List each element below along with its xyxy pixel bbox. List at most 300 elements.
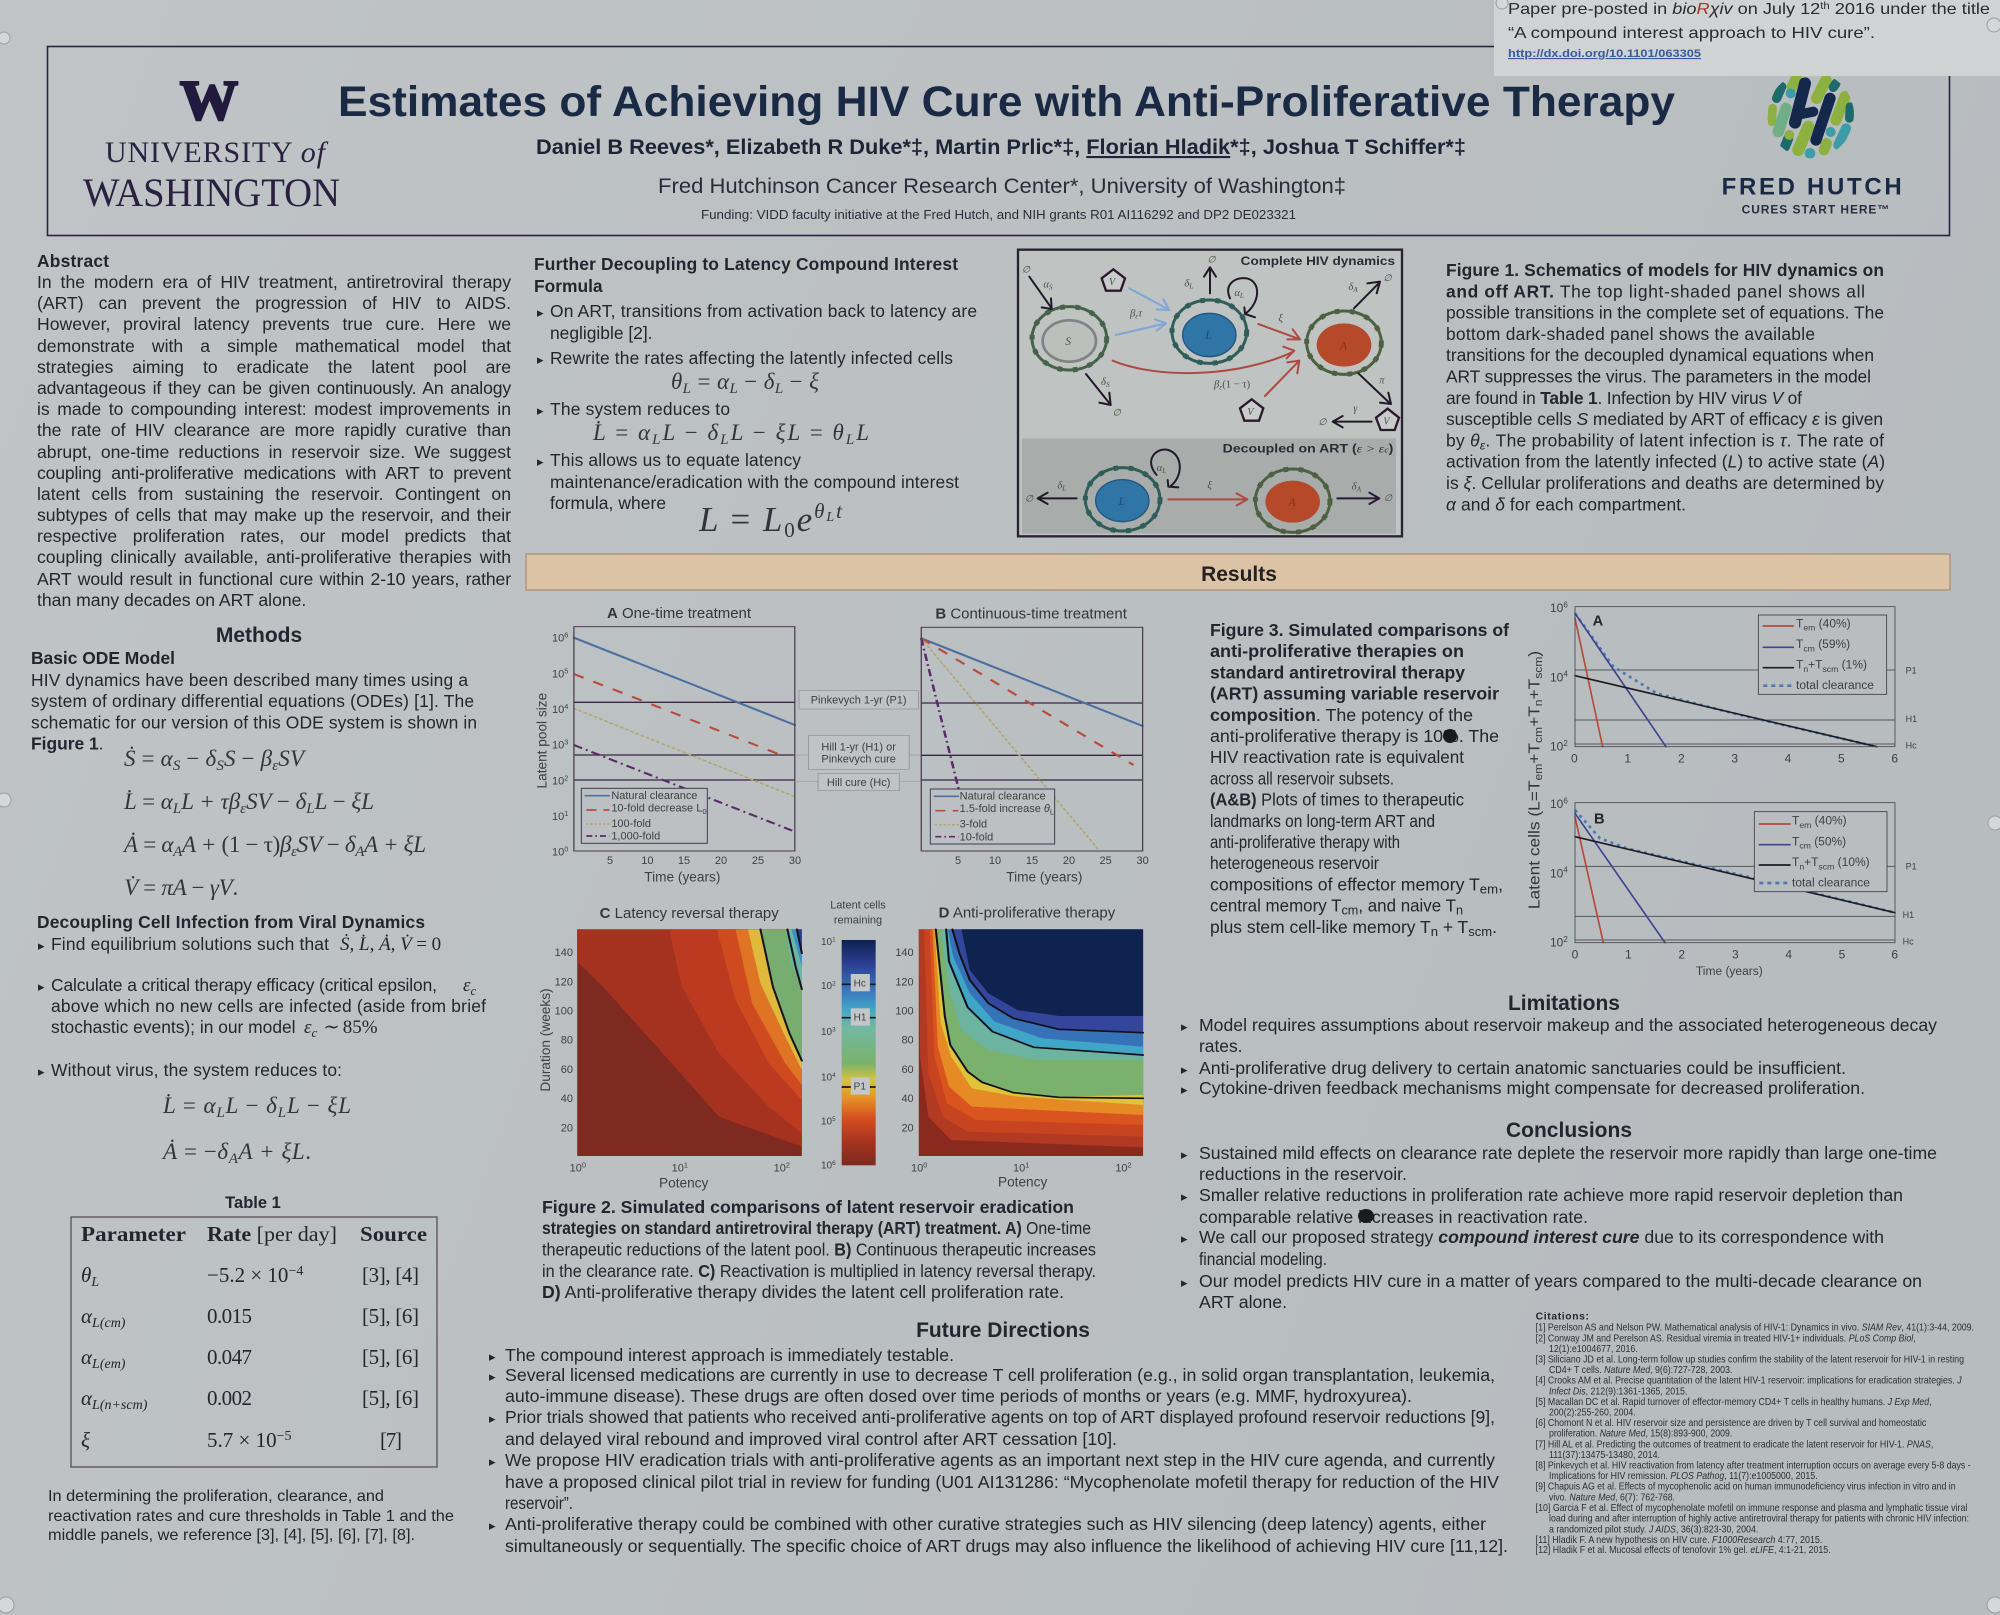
axes C: Duration (weeks) [538,988,553,1092]
red arrows [1113,324,1300,396]
legend 3A: T [1796,658,1803,672]
axis ticks A: 10 [552,740,564,752]
future directions bullets: Anti-proliferative therapy could be combined with other curative strategies such as HIV silencing (deep latency) agents, either [505,1514,1486,1534]
equation: L dot: L [651,432,660,448]
arrow labels: τ [1138,309,1143,320]
logo: University of Washington: UNIVERSITY of [105,136,329,169]
table rows: L(n+scm) [91,1398,148,1413]
abstract text: demonstrate with a simple mathematical model that [37,336,511,356]
axes 3A: 10 [1550,670,1563,684]
equation: compound interest: e [797,500,812,539]
arrow labels: ξ [1278,314,1283,325]
decoupled cell A [1255,469,1330,532]
abstract [37,251,511,617]
axes 3B: 6 [1563,796,1568,805]
axis ticks A: 15 [678,855,690,867]
limitations [1181,992,1937,1098]
decoupled labels: α [1157,463,1162,474]
equations: full ODE system: SV − δ [246,789,306,814]
decoupling bullets: stochastic events); in our model [51,1017,296,1037]
equation: L dot: L [855,420,869,445]
axis ticks B: 20 [1063,855,1075,867]
table rows: θ [81,1263,91,1287]
equations: full ODE system: ε [291,844,297,860]
citations list: [3] Siliciano JD et al. Long-term follow up studies confirm the stability of the latent reservoir for HIV-1 in resting [1536,1355,1964,1366]
threshold labels [795,691,921,791]
table header: Rate [per day] [207,1222,337,1246]
axes D: 2 [1128,1161,1132,1170]
decoupled labels: ∅ [1025,495,1034,505]
abstract text: is made to compounding interest: modest improvements in [37,399,511,419]
arrow labels: α [1234,288,1240,299]
axes 3A: 2 [1678,752,1685,766]
blue arrows [1116,288,1169,335]
equations: full ODE system: S [216,758,224,774]
figure 3 caption: landmarks on long-term ART and [1210,811,1435,831]
equation: theta L: θ [671,369,682,394]
axes 3B: 10 [1550,866,1563,880]
axes C: 80 [561,1035,573,1047]
figure 3 caption: anti-proliferative therapy is 10%. The [1210,726,1499,746]
equations: full ODE system: Ȧ = α [124,832,173,857]
limitations bullets: Cytokine-driven feedback mechanisms might compensate for decreased proliferation. [1199,1078,1865,1098]
axes 3B: 4 [1563,866,1568,875]
axes 3A: 2 [1563,739,1568,748]
abstract text: coupling clinically available, anti-proliferative therapies with [37,547,511,567]
heatmap D: anti-proliferative therapy: D Anti-proliferative therapy [939,904,1116,921]
figure 3 caption: n [1431,924,1438,939]
decoupling bullets [38,933,486,1080]
decoupled labels: ξ [1207,480,1212,491]
logo: University of Washington: W [180,70,238,132]
sticky note: paper pre-posted [1494,0,2000,76]
section bullets [537,301,977,513]
legend 3B: (50%) [1811,834,1846,848]
decoupled cell A: A [1288,497,1296,509]
colorbar: latent cells remaining: remaining [834,914,882,926]
axes 3A: 10 [1550,601,1563,615]
citations list: 200(2):255-260, 2004. [1549,1407,1636,1418]
figure 1 caption: ART suppresses the virus. The parameters in the model [1446,366,1871,386]
logo: University of Washington [83,70,340,215]
arrow labels: L [1239,291,1244,300]
citations list: [2] Conway JM and Perelson AS. Residual viremia in treated HIV-1+ individuals. PLoS Comp Biol, [1536,1333,1916,1344]
axis ticks A: 10 [552,811,564,823]
equation: compound interest: L [825,510,834,525]
legend 3B: +T [1804,855,1819,869]
citations list: 12(1):e1004677, 2016. [1549,1344,1638,1355]
conclusions [1181,1119,1937,1312]
legend 3A: em [1803,623,1815,633]
chart 3A [1550,600,1917,766]
axes 3A: 3 [1731,752,1738,766]
legend 3B: scm [1818,861,1834,871]
arrow labels: ε [1219,382,1222,391]
legend 3A: (40%) [1815,616,1851,630]
equations: reduced system: L − δ [226,1093,277,1118]
citations list: vivo. Nature Med, 6(7): 762-768. [1549,1492,1675,1503]
decoupled labels: δ [1057,480,1062,491]
decoupled labels: ∅ [1384,494,1393,504]
equations: reduced system: L [215,1105,225,1121]
future directions bullets: have a proposed clinical pilot trial in review for funding (U01 AI131286: “Mycophenolate mofetil therapy for reduction of the HIV [505,1472,1499,1492]
table rows: −5 [277,1429,292,1444]
axes D: 1 [1025,1161,1029,1170]
legend B: 1.5-fold increase θ [960,803,1050,815]
future directions bullets: auto-immune disease). These drugs are often dosed over time periods of months or years (e.g. MMF, hydroxyurea). [505,1386,1412,1406]
equations: full ODE system: A + ξL [362,832,426,857]
basic ODE model heading: Basic ODE Model [31,648,175,668]
equation: theta L: − ξ [790,369,819,394]
chart B: continuous-time treatment: B Continuous-time treatment [935,606,1128,623]
axis ticks A: 10 [552,847,564,859]
figure 2 caption: D) Anti-proliferative therapy divides the latent cell proliferation rate. [542,1282,1064,1302]
equations: full ODE system: L̇ = α [124,789,173,814]
axes 3B: 6 [1891,948,1898,962]
citations list: [8] Pinkevych et al. HIV reactivation from latency after treatment interruption occurs on average every 5-8 days - [1536,1461,1971,1472]
header panel [48,46,1950,236]
future directions bullets: ▸ [489,1412,496,1427]
legend B: L [1050,808,1054,817]
sticky note: paper pre-posted: 2016 under the title [1830,1,1990,18]
arrow labels: S [1049,282,1053,291]
legend 3A: T [1796,616,1803,630]
decoupling bullets: c [470,983,476,998]
figure 3 caption: cm [1341,903,1358,918]
axes 3B: 10 [1550,936,1563,950]
axes 3B: 1 [1625,948,1632,962]
citations list: [6] Chomont N et al. HIV reservoir size and persistence are driven by T cell survival and homeostatic [1536,1418,1926,1429]
equations: full ODE system: A [354,844,365,860]
axes 3A: 0 [1571,752,1578,766]
equation: compound interest: t [836,499,843,523]
future directions [489,1319,1508,1556]
future directions bullets: ▸ [489,1350,496,1365]
figure 1 caption: Figure 1. Schematics of models for HIV dynamics on [1446,260,1884,280]
results banner [526,554,1950,590]
authors: Daniel B Reeves*, Elizabeth R Duke*‡, Martin Prlic*‡, Florian Hladik*‡, Joshua T Schiffer*‡ [536,136,1466,159]
decoupling bullets: Without virus, the system reduces to: [51,1060,342,1080]
conclusions bullets: ▸ [1181,1232,1188,1247]
figure 2 bottom: heatmaps [538,900,1143,1190]
table rows [81,1263,419,1452]
table rows: 0.002 [207,1386,252,1410]
axes 3A [1550,600,1917,766]
axes D: 10 [911,1163,923,1175]
figure 3 charts: cm [1533,727,1545,743]
section bullets: ▸ [537,404,544,419]
future directions bullets: Prior trials showed that patients who received anti-proliferative agents on top of ART displayed profound reservoir reductions [9], [505,1407,1495,1427]
conclusions bullets: comparable relative increases in reactivation rate. [1199,1207,1588,1227]
citations list: Infect Dis, 212(9):1361-1365, 2015. [1549,1386,1687,1397]
colorbar: latent cells remaining: 10 [821,1072,832,1083]
colorbar: latent cells remaining: 4 [832,1072,836,1079]
citations list: 111(37):13475-13480, 2014. [1549,1450,1660,1461]
conclusions bullets: Sustained mild effects on clearance rate deplete the reservoir more rapidly than large one-time [1199,1143,1937,1163]
citations list: CD4+ T cells. Nature Med, 9(6):727-728, 2003. [1549,1365,1732,1376]
figure 2 caption: Figure 2. Simulated comparisons of latent reservoir eradication [542,1197,1074,1217]
decoupling bullets: Find equilibrium solutions such that [51,934,329,954]
axes D [895,947,1132,1190]
decoupling bullets: ▸ [38,1065,45,1080]
figure 3 charts: +T [1526,742,1543,764]
table rows: L(em) [91,1357,126,1372]
figure 3 caption: across all reservoir subsets. [1210,768,1394,788]
axes 3A: 1 [1624,752,1631,766]
limitations bullets: rates. [1199,1036,1242,1056]
citations list: [1] Perelson AS and Nelson PW. Mathematical analysis of HIV-1: Dynamics in vivo. SIAM Rev, 41(1):3-44, 2009. [1536,1323,1974,1334]
table rows: 0.015 [207,1304,252,1328]
section heading: Formula [534,276,603,296]
axis ticks A [552,631,801,884]
axes C: 60 [561,1064,573,1076]
arrow labels: δ [1101,377,1106,388]
figure 3 caption: em [1480,881,1498,896]
equation: theta L: L [682,381,691,397]
abstract text: However, proviral latency prevents true cure. Here we [37,314,511,334]
table rows: −5.2 × 10 [207,1263,288,1287]
equations: reduced system: Ȧ = −δ [163,1139,228,1164]
figure 3 caption: anti-proliferative therapies on [1210,641,1464,661]
sticky note: paper pre-posted: http://dx.doi.org/10.1101/063305 [1508,48,1701,60]
table rows: ξ [81,1428,90,1452]
axes C: 100 [555,1006,573,1018]
virus icons: V [1383,416,1391,427]
figure 3 caption: scm [1468,924,1492,939]
future directions bullets: We propose HIV eradication trials with anti-proliferative agents as an important next step in the HIV cure agenda, and currently [505,1450,1495,1470]
figure 3 caption: anti-proliferative therapy with [1210,832,1400,852]
axes 3B: 4 [1785,948,1792,962]
axes 3A: H1 [1906,714,1917,724]
equation: compound interest: 0 [784,518,795,542]
table rows: [5], [6] [362,1345,419,1369]
equations: full ODE system: S − β [224,746,272,771]
axes C: 0 [582,1161,586,1170]
section bullets: ▸ [537,353,544,368]
table rows: [5], [6] [362,1304,419,1328]
table rows: α [81,1386,92,1410]
panel label: complete dynamics: Complete HIV dynamics [1241,255,1395,268]
citations heading: Citations: [1536,1311,1589,1322]
arrow labels: γ [1353,404,1358,415]
equation: L dot: L − δ [662,420,718,445]
legend 3A: +T [1808,658,1823,672]
section heading [534,254,958,296]
equations: full ODE system: ε [272,758,278,774]
citations list: [10] Garcia F et al. Effect of mycophenolate mofetil on immune response and plasma and lymphatic tissue viral [1536,1503,1967,1514]
sticky note: paper pre-posted: Paper pre-posted in bioRχiv on July 12 [1508,1,1810,18]
further decoupling section [534,254,977,542]
legend A: 10-fold decrease L [611,802,702,814]
figure 3 caption: , and naive T [1358,896,1456,916]
future directions heading: Future Directions [916,1319,1090,1342]
basic ODE model text: HIV dynamics have been described many times using a [31,670,468,690]
figure 3 caption: (ART) assuming variable reservoir [1210,684,1499,704]
table note: middle panels, we reference [3], [4], [5], [6], [7], [8]. [48,1527,415,1544]
future directions bullets: ▸ [489,1519,496,1534]
future directions bullets: The compound interest approach is immediately testable. [505,1345,954,1365]
axis ticks A: 10 [552,669,564,681]
panel label: decoupled: Decoupled on ART ( ε > εc) [1223,443,1393,456]
decoupling heading: Decoupling Cell Infection from Viral Dynamics [37,912,425,932]
equations: reduced system: A + ξL. [238,1139,311,1164]
legend A: 100-fold [611,818,651,830]
future directions bullets: Several licensed medications are currently in use to decrease T cell proliferation (e.g., in solid organ transplantation, leukemia, [505,1365,1495,1385]
axes C: 2 [786,1161,790,1170]
colorbar: latent cells remaining: Latent cells [830,900,886,912]
limitations bullets: ▸ [1181,1020,1188,1035]
figure 3 caption: Figure 3. Simulated comparisons of [1210,620,1509,640]
section bullets: The system reduces to [550,399,730,419]
figure 3 caption [1210,620,1509,939]
axes C [538,947,790,1190]
axes 3A: 10 [1550,740,1563,754]
conclusions bullets: ▸ [1181,1276,1188,1291]
figure 3 caption: (A&B) Plots of times to therapeutic [1210,790,1464,810]
axes C: 120 [555,976,573,988]
legend B [930,789,1055,844]
citations list: [9] Chapuis AG et al. Effects of mycophenolic acid on human immunodeficiency virus infection in vitro and in [1536,1482,1956,1493]
arrow labels: β [1214,379,1219,390]
conclusions bullets [1181,1143,1937,1312]
figure 2 caption: strategies on standard antiretroviral therapy (ART) treatment. A) One-time [542,1218,1091,1238]
table header: Source [360,1222,427,1246]
table rows: L(cm) [91,1316,126,1331]
abstract text: (ART) can prevent the progression of HIV to AIDS. [37,293,511,313]
figure 3 charts: n [1533,699,1545,706]
affiliations: Fred Hutchinson Cancer Research Center*, University of Washington‡ [658,175,1346,198]
decoupled labels: δ [1352,481,1357,492]
axis ticks A: 5 [564,667,568,676]
figure 3 caption: heterogeneous reservoir [1210,853,1379,873]
equations: full ODE system: A + (1 − τ)β [182,832,291,857]
abstract text: In the modern era of HIV treatment, antiretroviral therapy [37,272,511,292]
figure 3 caption: compositions of effector memory T [1210,874,1476,894]
axes C: Potency [659,1175,709,1190]
decoupling bullets: c [312,1025,318,1040]
decoupling bullets: ∼ 85% [322,1017,378,1038]
section bullets: This allows us to equate latency [550,450,801,470]
methods heading: Methods [216,624,302,647]
logo mark [1772,77,1850,159]
limitations bullets: Anti-proliferative drug delivery to certain anatomic sanctuaries could be insufficient. [1199,1058,1846,1078]
axes C: 10 [570,1163,582,1175]
axes 3B: 2 [1563,935,1568,944]
axes D: 120 [895,976,914,988]
figure 3 caption: . [1492,917,1497,937]
legend 3A [1758,615,1887,694]
equations: reduced system: A [228,1151,239,1167]
axes 3B: Time (years) [1696,964,1763,978]
figure 1 caption: activation from the latently infected (L) to active state (A) [1446,452,1885,472]
figure 2 caption: in the clearance rate. C) Reactivation is multiplied in latency reversal therapy. [542,1261,1096,1281]
legend B: Natural clearance [960,791,1046,803]
chart 3A: A [1593,614,1604,630]
equations: full ODE system: Ṡ = α [124,746,173,771]
table header [81,1222,427,1246]
equation: compound interest: L = L [699,500,782,539]
figure 1 caption: ε [1480,438,1486,452]
figure 1 caption: bottom dark-shaded panel shows the available [1446,324,1815,344]
figure 1 caption: τ. The rate of [1780,430,1884,450]
conclusions bullets: Our model predicts HIV cure in a matter of years compared to the multi-decade clearance on [1199,1271,1922,1291]
citations list: Implications for HIV remission. PLOS Pathog, 11(7):e1005000, 2015. [1549,1471,1818,1482]
legend B: 10-fold [960,831,993,843]
table rows: 5.7 × 10 [207,1428,277,1452]
legend 3B: T [1792,814,1799,828]
equations: full ODE system: A [172,844,183,860]
abstract text: coupling anti-proliferative medications with ART to prevent [37,463,511,483]
table rows: 0.047 [207,1345,252,1369]
table rows: α [81,1345,92,1369]
limitations bullets: Model requires assumptions about reservoir makeup and the associated heterogeneous decay [1199,1015,1937,1035]
decoupling bullets: Calculate a critical therapy efficacy (critical epsilon, [51,975,437,995]
table rows: L [90,1275,99,1290]
arrow labels: ∅ [1207,255,1216,265]
legend A: 1,000-fold [611,831,660,843]
equation: theta L: L [728,381,738,397]
figure 3 caption: standard antiretroviral therapy [1210,662,1465,682]
figure 3 caption: HIV reactivation rate is equivalent [1210,747,1464,767]
conclusions bullets: Smaller relative reductions in proliferation rate achieve more rapid reservoir depletion than [1199,1185,1903,1205]
virus icons: V [1247,407,1255,418]
legend 3A: cm [1803,643,1815,653]
future directions bullets: reservoir”. [505,1493,573,1513]
figure 3 caption: plus stem cell-like memory T [1210,917,1430,937]
colorbar: latent cells remaining: Hc [854,978,866,989]
legend A: Natural clearance [611,790,697,802]
legend 3B: T [1792,855,1799,869]
axis ticks A: 1 [564,809,568,818]
table rows: [5], [6] [362,1386,419,1410]
conclusions bullets: reductions in the reservoir. [1199,1164,1407,1184]
axes 3B: P1 [1906,862,1917,872]
figure 3 charts: +T [1526,678,1543,699]
axis ticks A: 6 [564,631,568,640]
decoupling bullets: above which no new cells are infected (aside from brief [51,996,486,1016]
equation: theta L: − δ [744,369,774,394]
equations: reduced system [161,1093,351,1167]
citations [1536,1311,1974,1556]
cell L: L [1204,330,1212,342]
arrow labels: ∅ [1318,418,1327,428]
abstract text: subtypes of cells that may make up the reservoir, and their [37,505,511,525]
abstract text: than many decades on ART alone. [37,590,306,610]
results banner: Results [1201,563,1277,586]
legend B: 3-fold [960,819,987,831]
axes D: 60 [901,1064,914,1076]
citations list: [4] Crooks AM et al. Precise quantitation of the latent HIV-1 reservoir: implications for eradication strategies. J [1536,1376,1962,1387]
decoupled labels: L [1061,483,1066,492]
citations list: [11] Hladik F. A new hypothesis on HIV cure. F1000Research 4:77, 2015. [1536,1535,1822,1546]
equation: L dot: L̇ = α [593,420,650,445]
equations: full ODE system [122,746,426,900]
axis ticks B: 25 [1100,855,1112,867]
axis ticks A: 25 [752,855,764,867]
section bullets: ▸ [537,306,544,321]
axes 3A: 6 [1891,752,1898,766]
cell A [1307,311,1381,374]
legend 3B: total clearance [1792,875,1870,889]
axes D: 40 [901,1093,914,1105]
equation: L dot: L [845,432,854,448]
title: Estimates of Achieving HIV Cure with Anti-Proliferative Therapy [338,78,1675,126]
arrow labels: ε [1135,312,1138,321]
heatmap C: latency reversal therapy [538,905,802,1190]
decoupled cell L: L [1118,496,1125,508]
threshold labels: Hill cure (Hc) [827,777,890,789]
conclusions bullets: ▸ [1181,1190,1188,1205]
